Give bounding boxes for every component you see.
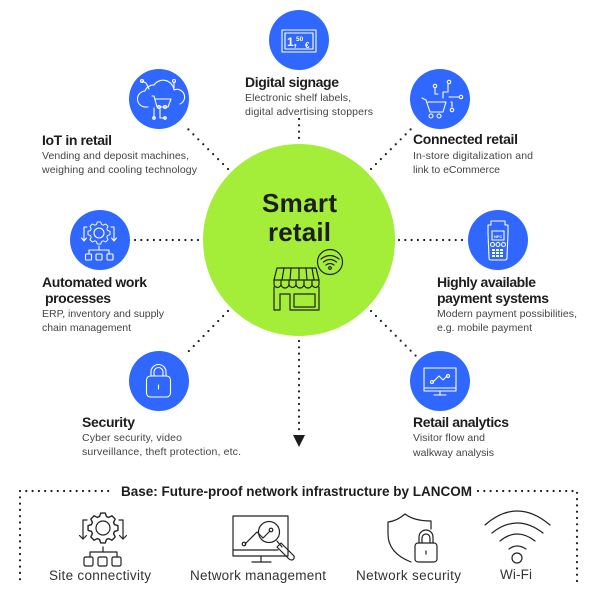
description [413, 150, 533, 176]
icon: padlock [129, 351, 189, 411]
description: walkway analysis [412, 447, 494, 459]
description: Electronic shelf labels, [245, 92, 351, 104]
panel: IoT in retail [41, 69, 198, 176]
panel: payment systems [437, 210, 577, 334]
description [437, 308, 577, 334]
description [41, 150, 198, 176]
icon: analytics monitor [410, 351, 470, 411]
description: chain management [42, 322, 131, 334]
label: Wi-Fi [500, 567, 532, 582]
description: ERP, inventory and supply [42, 308, 165, 320]
icon: price label: € [305, 41, 310, 50]
heading [437, 274, 549, 306]
icon: monitor with magnifier [233, 516, 294, 562]
label: Network security [356, 568, 461, 583]
icon: gear and flow chart [70, 210, 130, 270]
panel: digital signage [245, 10, 373, 118]
heading: IoT in retail [42, 132, 112, 148]
description: Modern payment possibilities, [437, 308, 577, 320]
description [42, 308, 165, 334]
item: site connectivity [49, 513, 151, 583]
description: e.g. mobile payment [437, 322, 532, 334]
heading: Automated work [42, 274, 147, 290]
description: link to eCommerce [413, 164, 500, 176]
heading: Security [82, 414, 135, 430]
heading: Connected retail [413, 131, 518, 147]
item: network security [356, 514, 461, 583]
item: network management [190, 516, 326, 583]
icon: shop with wifi [274, 250, 342, 310]
hub title: Smart [262, 188, 337, 218]
arrow: downward to base [293, 435, 305, 447]
icon: price label: 50 [296, 36, 304, 43]
heading [42, 274, 147, 306]
icon: wifi [485, 511, 550, 563]
description: Visitor flow and [413, 432, 485, 444]
panel: smart retail hub [203, 144, 395, 336]
item: wi-fi [485, 511, 550, 582]
description: surveillance, theft protection, etc. [82, 446, 241, 458]
hub title [262, 188, 337, 247]
hub circle [203, 144, 395, 336]
panel: security [82, 351, 241, 458]
description: Vending and deposit machines, [42, 150, 189, 162]
description [412, 432, 494, 459]
icon: cart with circuit [410, 69, 470, 129]
description: weighing and cooling technology [41, 164, 198, 176]
icon: cloud with cart [129, 69, 189, 129]
hub title: retail [268, 217, 331, 247]
icon: price label [269, 10, 329, 70]
heading: Digital signage [245, 74, 339, 90]
label: Network management [190, 568, 326, 583]
description: In-store digitalization and [413, 150, 533, 162]
panel: base network infrastructure [20, 484, 577, 583]
heading: processes [45, 290, 111, 306]
description [82, 432, 241, 458]
icon: price label: 1, [287, 35, 297, 49]
description: digital advertising stoppers [245, 106, 373, 118]
panel: retail analytics [410, 351, 509, 459]
heading: Retail analytics [413, 414, 509, 430]
heading: payment systems [437, 290, 549, 306]
panel: connected retail [410, 69, 533, 176]
base heading: Base: Future-proof network infrastructure by LANCOM [121, 484, 472, 499]
description [245, 92, 373, 118]
icon: shield with padlock [388, 514, 437, 562]
description: Cyber security, video [82, 432, 182, 444]
icon: payment terminal: NFC [494, 234, 502, 239]
icon: gear and flow chart [80, 513, 126, 566]
panel: automated work processes [42, 210, 165, 334]
label: Site connectivity [49, 568, 151, 583]
heading: Highly available [437, 274, 536, 290]
